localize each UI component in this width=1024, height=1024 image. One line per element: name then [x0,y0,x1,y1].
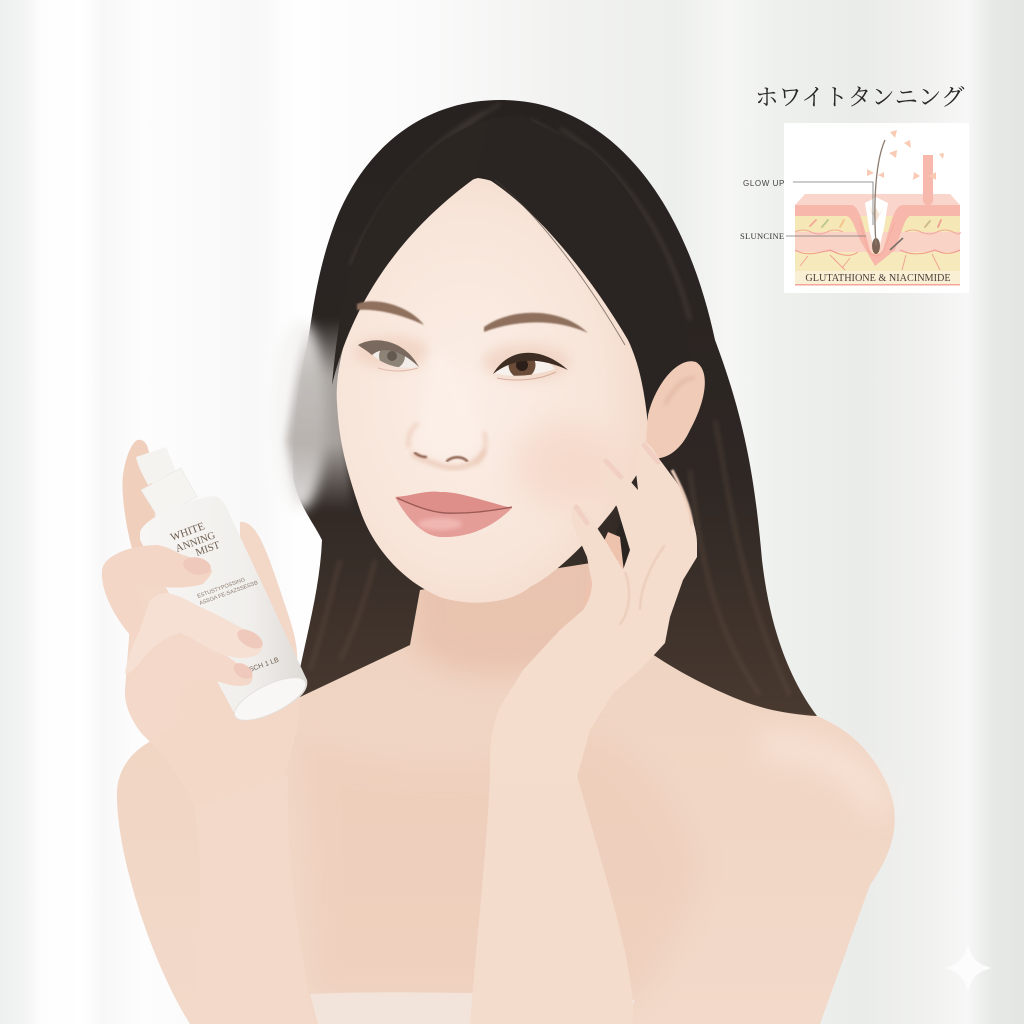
hair front strands [332,115,690,425]
pump [136,447,176,485]
hair follicle [865,140,888,254]
bottle neck [141,468,197,517]
index finger [102,545,212,643]
face [337,178,650,603]
peach needle [923,155,933,208]
bottle [136,447,311,729]
band text: GLUTATHIONE & NIACINMIDE [805,273,951,284]
bottle label: ASSGA FE-SAZSSESSB [199,580,259,607]
strapless top [310,992,635,1024]
particles [867,130,944,180]
cheek hand [490,442,697,777]
eye socket shading [354,336,570,380]
diagram band [795,271,960,284]
left eyebrow [357,301,424,325]
sluncine label [740,231,866,241]
hair back [293,100,817,725]
ring finger [125,637,253,740]
forearm right [470,760,633,1024]
left eye [358,340,419,371]
hair behind fingers [616,482,652,572]
sparkle [944,944,992,992]
bottle label [169,520,280,674]
spray mist on hair [274,320,352,510]
band bottom line [795,284,960,286]
holding fingers [102,545,266,740]
glow up label: GLOW UP [743,179,785,188]
bottle label: MIST [194,540,222,559]
bottle body [140,496,307,720]
sluncine label: SLUNCINE [740,231,784,241]
middle finger [125,593,263,673]
glow up label [743,179,873,225]
lips [395,492,512,537]
fingernails [182,555,266,682]
lobule lines [795,230,960,234]
dermis V [795,205,960,266]
bottle label: ANNING [174,530,217,555]
thumb [583,532,624,620]
bottle label: SCH 1 LB [248,657,280,674]
doodles [810,220,941,227]
cheek blush [515,423,615,507]
skin diagram panel [740,123,969,293]
skin layers [795,194,960,285]
diagram title: ホワイトタンニング [755,85,965,111]
bottle label: WHITE [169,520,207,544]
hand palm and back fingers [122,440,300,808]
bottle base [229,669,311,729]
body and shoulders [117,540,895,1024]
right eye [493,352,568,380]
ear [645,361,705,459]
finger creases and nails [620,545,665,625]
nose [408,340,486,468]
forearm left [190,775,315,1024]
diagram background [784,123,969,293]
right eyebrow [484,313,588,333]
bottle label: ESTUSTYPOSSING [197,577,246,600]
